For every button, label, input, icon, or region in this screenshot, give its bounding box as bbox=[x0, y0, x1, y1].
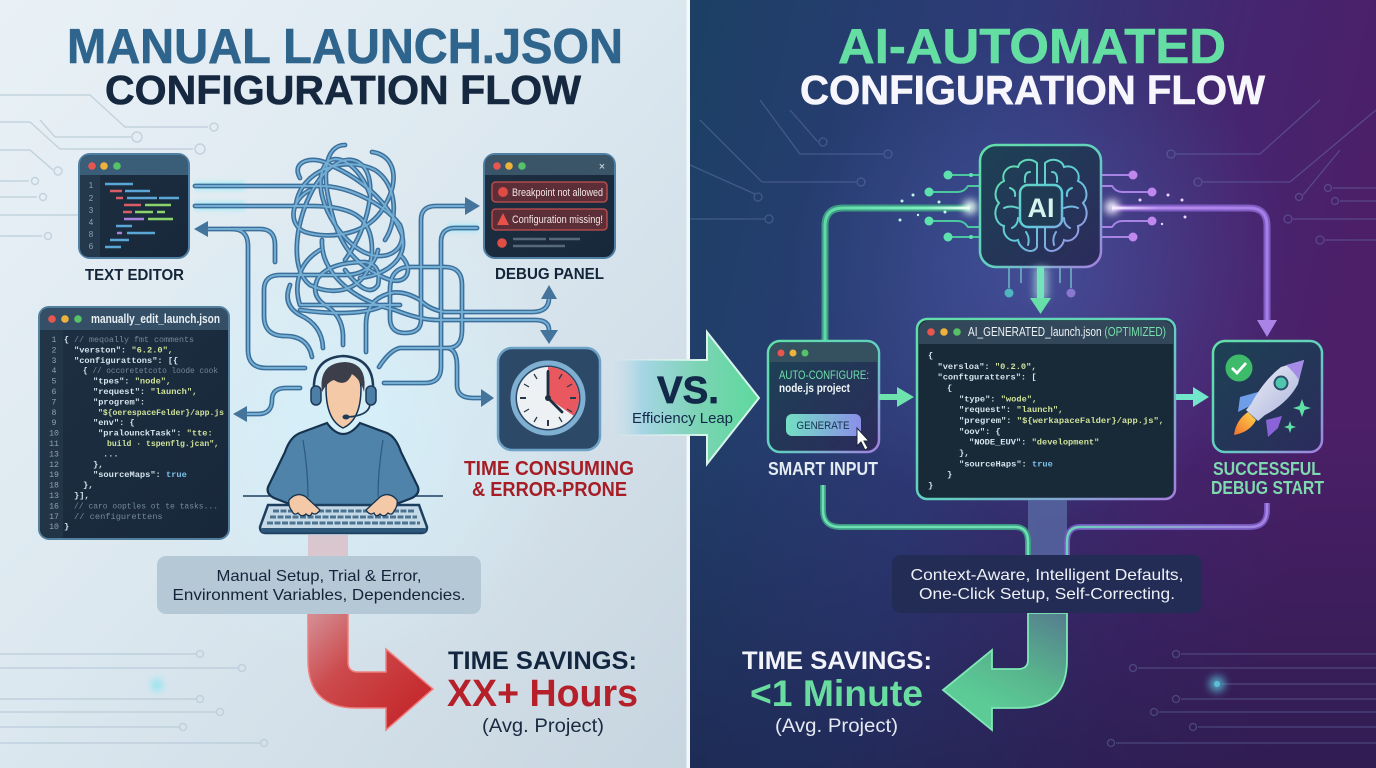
alert: configuration missing: Configuration missing! bbox=[512, 214, 603, 226]
label: time consuming and error-prone bbox=[464, 458, 634, 501]
connector: AI to smart input bbox=[825, 200, 977, 341]
icon: text editor window: 1 bbox=[89, 181, 94, 190]
panel: manually edited launch.json: { // meqoally fmt comments bbox=[64, 335, 194, 345]
callout: manual setup summary: Environment Variables, Dependencies. bbox=[172, 587, 466, 604]
panel: manually edited launch.json: 6 bbox=[52, 388, 57, 397]
icon: text editor window bbox=[79, 154, 189, 258]
panel: smart input: node.js project bbox=[779, 381, 850, 395]
icon: text editor window: 4 bbox=[89, 218, 94, 227]
icon: debug panel window: × bbox=[599, 161, 605, 173]
stat: AI time savings: <1 Minute bbox=[750, 673, 923, 714]
panel: manually edited launch.json: }, bbox=[93, 460, 103, 470]
callout: AI summary: One-Click Setup, Self-Correcting. bbox=[919, 586, 1175, 603]
panel: AI generated launch.json: "sourceHaps": true bbox=[959, 459, 1053, 469]
icon: AI brain chip: AI bbox=[1028, 193, 1054, 223]
panel: manually edited launch.json: "sourceMaps": true bbox=[93, 470, 187, 480]
panel: manually edited launch.json: "${oerespaceFelder}/app.js bbox=[98, 408, 224, 418]
title: manual flow bbox=[67, 20, 623, 113]
callout: AI summary: Context-Aware, Intelligent Defaults, bbox=[910, 567, 1184, 584]
stat: manual time savings: (Avg. Project) bbox=[482, 716, 604, 737]
label: successful debug start: SUCCESSFUL bbox=[1213, 459, 1321, 479]
panel: manually edited launch.json: 18 bbox=[49, 482, 59, 491]
icon: text editor window: 8 bbox=[89, 230, 94, 239]
stat: manual time savings bbox=[447, 647, 638, 737]
title: AI flow bbox=[800, 20, 1265, 113]
icon: text editor window: 2 bbox=[89, 194, 94, 203]
panel: manually edited launch.json: 17 bbox=[49, 513, 59, 522]
panel: manually edited launch.json: }], bbox=[74, 491, 90, 501]
panel: manually edited launch.json: 13 bbox=[49, 450, 59, 459]
headset bbox=[314, 356, 373, 392]
divider bbox=[686, 0, 690, 768]
panel: manually edited launch.json bbox=[39, 307, 229, 539]
arrowheads on wires bbox=[194, 197, 558, 422]
panel: AI generated launch.json: "request": "launch", bbox=[959, 405, 1063, 415]
panel: manually edited launch.json: }, bbox=[83, 481, 93, 491]
panel: manually edited launch.json: manually_edit_launch.json bbox=[91, 311, 220, 326]
panel: manually edited launch.json: 16 bbox=[49, 502, 59, 511]
panel: manually edited launch.json: "env": { bbox=[93, 418, 135, 428]
panel: AI generated launch.json: { bbox=[928, 351, 933, 361]
stat: AI time savings: (Avg. Project) bbox=[775, 716, 898, 737]
panel: AI generated launch.json bbox=[917, 319, 1175, 499]
panel: manually edited launch.json: "request": "launch", bbox=[93, 387, 197, 397]
label: time consuming and error-prone: TIME CONSUMING bbox=[464, 458, 634, 480]
panel: AI generated launch.json: "versloa": "0.2.0", bbox=[938, 362, 1037, 372]
icon: rocket success bbox=[1213, 341, 1322, 452]
icon: cursor bbox=[857, 428, 869, 450]
arrow: AI to generated config bbox=[1030, 267, 1051, 314]
label: successful debug start: DEBUG START bbox=[1211, 478, 1324, 498]
title: AI flow: AI-AUTOMATED bbox=[838, 20, 1226, 74]
arrow: input to generated config bbox=[879, 387, 914, 407]
panel: manually edited launch.json: 12 bbox=[49, 461, 59, 470]
panel: AI generated launch.json: "type": "wode", bbox=[959, 394, 1037, 404]
arrow: manual flow to time savings bbox=[308, 535, 433, 730]
panel: manually edited launch.json: 8 bbox=[52, 409, 57, 418]
label: successful debug start bbox=[1211, 459, 1324, 498]
icon: clock bbox=[498, 348, 600, 450]
panel: AI generated launch.json: }, bbox=[959, 448, 969, 458]
arrow: VS efficiency leap bbox=[610, 332, 759, 464]
icon: debug panel window bbox=[484, 154, 615, 258]
panel: manually edited launch.json: // caro ooptles ot te tasks... bbox=[74, 501, 218, 511]
panel: manually edited launch.json: "tpes": "node", bbox=[93, 377, 171, 387]
arrow: VS efficiency leap: VS. bbox=[657, 370, 719, 412]
panel: smart input: AUTO-CONFIGURE: bbox=[779, 368, 869, 382]
alert: breakpoint: Breakpoint not allowed bbox=[512, 187, 603, 199]
stat: manual time savings: XX+ Hours bbox=[447, 673, 638, 715]
stat: AI time savings: TIME SAVINGS: bbox=[742, 647, 932, 675]
hair bbox=[321, 362, 365, 392]
panel: manually edited launch.json: "progrem": bbox=[93, 397, 145, 407]
panel: manually edited launch.json: 19 bbox=[49, 471, 59, 480]
stat: manual time savings: TIME SAVINGS: bbox=[448, 647, 637, 675]
label: text editor: TEXT EDITOR bbox=[85, 267, 184, 284]
title: AI flow: CONFIGURATION FLOW bbox=[800, 67, 1265, 113]
connector: bottom merge lines bbox=[823, 485, 1267, 556]
panel: AI generated launch.json: "oov": { bbox=[959, 427, 1001, 437]
illustration: developer at keyboard bbox=[243, 356, 443, 533]
panel: manually edited launch.json: 11 bbox=[49, 440, 59, 449]
connector: AI to debug start bbox=[1105, 200, 1277, 337]
icon: text editor window: 6 bbox=[89, 242, 94, 251]
panel: manually edited launch.json: 13 bbox=[49, 492, 59, 501]
panel: smart input bbox=[768, 341, 879, 452]
title: manual flow: CONFIGURATION FLOW bbox=[105, 67, 581, 113]
panel: manually edited launch.json: 4 bbox=[52, 367, 57, 376]
icon: AI brain chip bbox=[898, 145, 1186, 298]
callout: manual setup summary: Manual Setup, Trial & Error, bbox=[216, 568, 422, 585]
panel: manually edited launch.json: "pralounckTask": "tte: bbox=[98, 429, 213, 439]
icon: text editor window: 3 bbox=[89, 206, 94, 215]
panel: AI generated launch.json: "conftguratters": [ bbox=[938, 373, 1037, 383]
callout: manual setup summary bbox=[157, 556, 481, 614]
panel: AI flow background bbox=[690, 0, 1376, 768]
tangled wires bbox=[194, 145, 558, 422]
label: debug panel: DEBUG PANEL bbox=[495, 266, 604, 283]
arrow: VS efficiency leap: Efficiency Leap bbox=[632, 410, 733, 427]
callout: AI summary bbox=[892, 555, 1202, 613]
panel: manually edited launch.json: 10 bbox=[49, 430, 59, 439]
keyboard bbox=[260, 505, 427, 533]
stat: AI time savings bbox=[742, 647, 932, 737]
panel: manually edited launch.json: ... bbox=[103, 449, 119, 459]
panel: AI generated launch.json: "NODE_EUV": "development" bbox=[969, 438, 1099, 448]
title: manual flow: MANUAL LAUNCH.JSON bbox=[67, 20, 623, 74]
sweater bbox=[268, 423, 418, 508]
arrow: AI flow to time savings bbox=[943, 613, 1067, 730]
panel: manually edited launch.json: build · tspenflg.jcan", bbox=[107, 439, 219, 449]
panel: manually edited launch.json: 1 bbox=[52, 336, 57, 345]
panel: manually edited launch.json: 5 bbox=[52, 378, 57, 387]
check badge bbox=[1226, 354, 1252, 382]
button: generate: GENERATE bbox=[796, 420, 850, 432]
label: smart input: SMART INPUT bbox=[768, 459, 878, 479]
panel: manual flow background bbox=[0, 0, 688, 768]
panel: AI generated launch.json: "pregrem": "${werkapaceFalder}/app.js", bbox=[959, 416, 1164, 426]
face bbox=[326, 372, 361, 428]
arrow: generated config to debug start bbox=[1176, 387, 1209, 407]
panel: manually edited launch.json: 7 bbox=[52, 398, 57, 407]
panel: manually edited launch.json: { // occoretetcoto loode cook bbox=[83, 366, 218, 376]
hands bbox=[289, 495, 320, 516]
panel: manually edited launch.json: "verston": "6.2.0", bbox=[74, 345, 173, 355]
panel: manually edited launch.json: "configurattons": [{ bbox=[74, 356, 178, 366]
panel: AI generated launch.json: { bbox=[947, 384, 952, 394]
panel: manually edited launch.json: 3 bbox=[52, 357, 57, 366]
panel: AI generated launch.json: } bbox=[947, 470, 952, 480]
panel: manually edited launch.json: 9 bbox=[52, 419, 57, 428]
panel: AI generated launch.json: } bbox=[928, 481, 933, 491]
panel: manually edited launch.json: } bbox=[64, 522, 69, 532]
panel: manually edited launch.json: // cenfigurettens bbox=[74, 512, 163, 522]
panel: manually edited launch.json: 2 bbox=[52, 346, 57, 355]
panel: manually edited launch.json: 10 bbox=[49, 523, 59, 532]
label: time consuming and error-prone: & ERROR-PRONE bbox=[472, 479, 627, 501]
panel: AI generated launch.json: AI_GENERATED_launch.json (OPTIMIZED) bbox=[968, 325, 1166, 339]
